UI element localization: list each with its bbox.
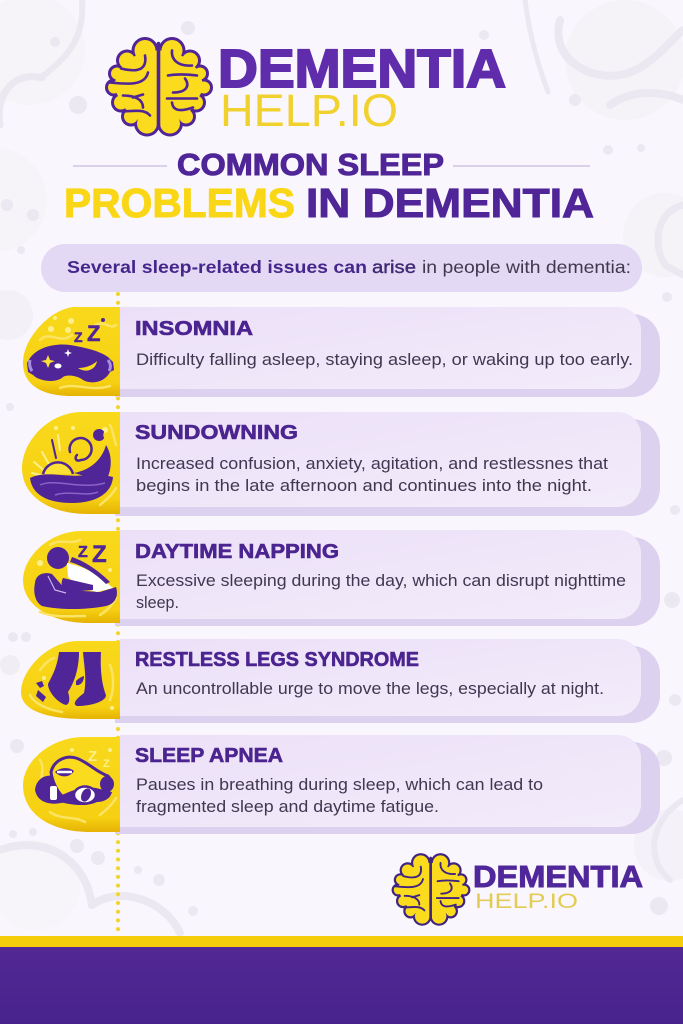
card: sleep apnea (23, 735, 660, 834)
logo wordmark: Help.io: HELP.IO (220, 85, 398, 136)
card back (115, 419, 660, 516)
title rule left (73, 166, 167, 167)
dotted timeline (116, 294, 120, 934)
icon: sleep mask (23, 307, 120, 396)
icon: restless legs (21, 641, 120, 719)
logo wordmark: Dementia: DEMENTIA (218, 39, 506, 99)
intro banner: Several sleep-related issues can (67, 257, 367, 277)
footer purple band (0, 947, 683, 1024)
intro banner (41, 244, 642, 292)
card front (120, 735, 641, 827)
footer logo (392, 853, 643, 926)
card back (115, 314, 660, 397)
logo: Dementia Help.io (105, 37, 506, 136)
title line: Common Sleep: COMMON SLEEP (177, 147, 444, 182)
heading: SLEEP APNEA (135, 745, 283, 767)
card front (120, 307, 641, 389)
icon: sleep mask: Z (87, 321, 100, 346)
zzz: Z (78, 544, 88, 561)
icon: sleep apnea mask: Z (103, 758, 110, 770)
description: begins in the late afternoon and continues into the night. (136, 476, 592, 495)
card back (115, 537, 660, 626)
heading: RESTLESS LEGS SYNDROME (135, 649, 419, 671)
description (136, 454, 608, 495)
icon: person napping on sofa: Z (92, 541, 107, 568)
heading: DAYTIME NAPPING (135, 541, 339, 563)
card back (115, 646, 660, 723)
description: An uncontrollable urge to move the legs, especially at night. (136, 679, 604, 698)
title line: Problems: PROBLEMS (64, 180, 295, 226)
icon: sleep apnea mask (23, 737, 120, 832)
footer yellow stripe (0, 936, 683, 947)
icon: person napping on sofa (23, 531, 120, 623)
title line: In Dementia: IN DEMENTIA (306, 180, 594, 226)
title (64, 147, 594, 226)
icon: brain small (392, 853, 470, 926)
zzz: Z (74, 329, 83, 345)
footer wordmark: Dementia: DEMENTIA (473, 859, 643, 894)
card front (120, 639, 641, 716)
description: fragmented sleep and daytime fatigue. (136, 797, 439, 816)
card: sundowning (22, 412, 660, 516)
intro banner: arise (372, 257, 416, 277)
description (136, 571, 626, 612)
heading: SUNDOWNING (135, 422, 298, 444)
card: insomnia (23, 307, 660, 397)
heading: INSOMNIA (135, 318, 253, 340)
description: Pauses in breathing during sleep, which can lead to (136, 775, 543, 794)
icon: sunset and moon (22, 412, 120, 514)
zzz: Z (88, 748, 97, 765)
card: restless legs syndrome (21, 639, 660, 723)
card front (120, 530, 641, 619)
description: Difficulty falling asleep, staying asleep, or waking up too early. (136, 350, 633, 369)
card front (120, 412, 641, 507)
card back (115, 742, 660, 834)
icon: brain (105, 37, 213, 136)
intro banner: in people with dementia: (422, 257, 631, 277)
description (136, 775, 543, 816)
card: daytime napping (23, 530, 660, 626)
description: Increased confusion, anxiety, agitation, and restlessnes that (136, 454, 608, 473)
title rule right (453, 166, 590, 167)
footer wordmark: Help.io: HELP.IO (475, 890, 578, 913)
description: Excessive sleeping during the day, which can disrupt nighttime (136, 571, 626, 590)
description: sleep. (136, 593, 179, 612)
